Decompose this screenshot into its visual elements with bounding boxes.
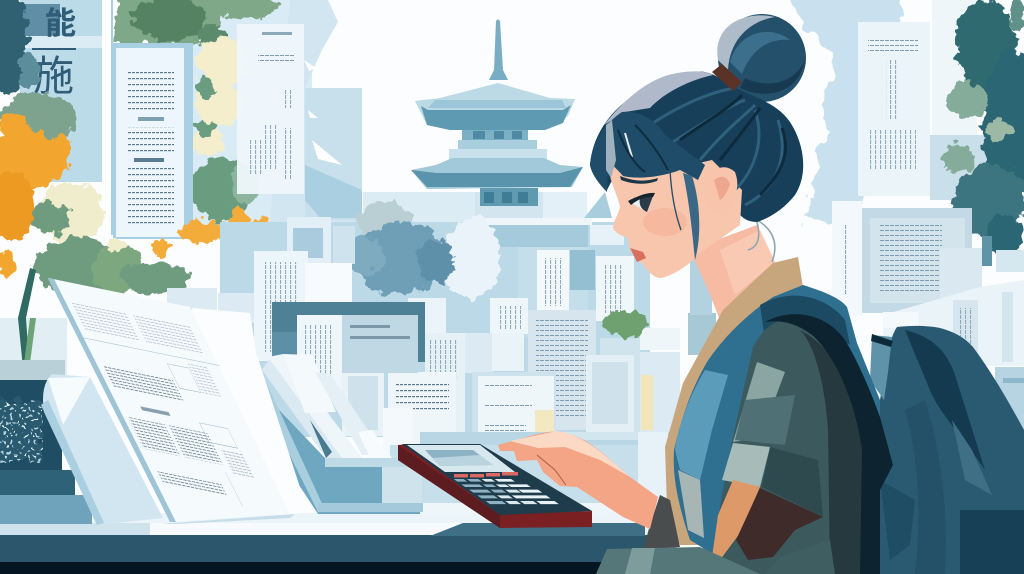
panel: light brush behind head bbox=[785, 0, 900, 220]
large form document bbox=[48, 278, 308, 524]
girl: head bbox=[590, 14, 806, 278]
dark frame with notices bbox=[272, 302, 425, 393]
foliage: cream blossoms bbox=[192, 38, 248, 156]
backpack bbox=[870, 326, 1024, 574]
lips bbox=[630, 248, 646, 262]
hair mass bbox=[590, 71, 803, 222]
fringe bbox=[590, 112, 705, 192]
collar: beige bbox=[665, 257, 803, 545]
vase with flowers bbox=[0, 268, 92, 524]
foliage: fern bbox=[192, 79, 260, 222]
document tray with papers bbox=[240, 354, 423, 514]
documents: middle wall cluster bbox=[167, 217, 716, 454]
jacket front and cuff bbox=[596, 495, 760, 574]
ear bbox=[705, 167, 737, 212]
face bbox=[608, 160, 742, 278]
panel: pale building blocks behind pagoda bbox=[220, 192, 650, 437]
hair top highlight bbox=[604, 71, 713, 125]
tree: right bbox=[942, 0, 1024, 257]
calculator bbox=[398, 444, 592, 528]
flowers: orange right bbox=[151, 208, 271, 256]
documents: right wall bbox=[832, 201, 1024, 467]
panel: kanji sign: 能 bbox=[45, 6, 76, 41]
calculator keypad bbox=[454, 479, 559, 504]
hair tie bbox=[712, 64, 742, 91]
back page of form bbox=[192, 308, 308, 516]
panel: right upper board bbox=[930, 0, 990, 200]
plant: small green sprout bbox=[604, 311, 648, 337]
panel: kanji sign bbox=[20, 0, 113, 235]
document: right tall notice bbox=[858, 22, 930, 196]
form text blocks bbox=[72, 303, 139, 340]
panel: kanji sign: 施 bbox=[33, 53, 74, 99]
backpack strap bbox=[870, 335, 892, 400]
document: vertical notice bbox=[113, 43, 193, 239]
document: vertical scroll bbox=[237, 24, 342, 194]
book leaning bbox=[41, 374, 163, 525]
scarf: blue bbox=[674, 285, 880, 574]
desk bbox=[0, 513, 660, 574]
panel: pale blue back wall left bbox=[192, 0, 362, 235]
bun bbox=[717, 14, 806, 102]
bush: blue tree bbox=[347, 202, 500, 298]
front page of form bbox=[48, 278, 290, 522]
shelf and lower counter bbox=[390, 432, 680, 533]
foliage: green block top bbox=[115, 0, 276, 46]
flowers: orange left bbox=[0, 114, 72, 275]
brow bbox=[620, 176, 658, 184]
neck bbox=[690, 225, 778, 320]
calculator red keys bbox=[454, 472, 518, 478]
hand bbox=[498, 431, 658, 529]
jacket sleeve bbox=[710, 314, 893, 574]
eye bbox=[631, 196, 653, 212]
foliage: cream and green bush left bbox=[30, 182, 190, 298]
hair strands bbox=[650, 88, 782, 205]
foliage: dark tree left bbox=[0, 0, 76, 143]
pagoda bbox=[411, 20, 583, 206]
hair wisps behind neck bbox=[748, 215, 775, 262]
side lock bbox=[683, 173, 699, 260]
